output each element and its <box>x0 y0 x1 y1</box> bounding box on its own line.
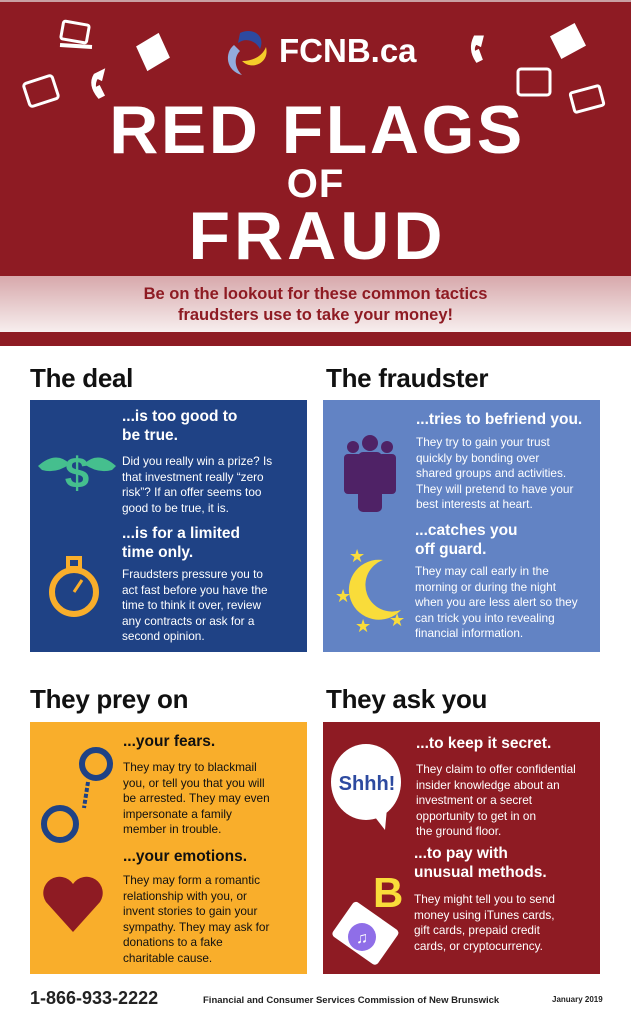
panel: the fraudster: quickly by bonding over <box>416 450 539 464</box>
panel: they ask you: investment or a secret <box>416 793 532 807</box>
footer: date: January 2019 <box>552 995 603 1004</box>
panel: the fraudster: financial information. <box>415 626 523 640</box>
header banner <box>0 0 631 346</box>
icon: winged dollar <box>38 449 116 498</box>
title <box>109 92 525 274</box>
panel: the deal: second opinion. <box>122 629 205 643</box>
panel: they prey on: charitable cause. <box>123 950 212 964</box>
icon: winged dollar: $ <box>65 449 89 498</box>
icon: handcuffs <box>41 747 113 843</box>
panel: they prey on: relationship with you, or <box>123 888 247 902</box>
icon: moon and stars: ★ <box>349 546 365 566</box>
panel: they prey on: ...your fears. <box>123 733 215 750</box>
icon: bitcoin and gift card: B <box>373 869 403 916</box>
panel: the deal: ...is for a limited <box>122 525 240 542</box>
panel: they prey on: ...your emotions. <box>123 848 247 865</box>
icon: moon and stars <box>335 546 405 635</box>
panel: the fraudster: when you are less alert so they <box>415 595 578 609</box>
title: RED FLAGS <box>109 92 525 168</box>
icon: Shhh speech bubble <box>331 744 401 830</box>
panel: they ask you <box>323 722 600 974</box>
panel: the fraudster: They will pretend to have your <box>416 482 573 496</box>
icon: moon and stars: ★ <box>389 610 405 630</box>
panel: the deal <box>30 400 307 652</box>
panel: they prey on: They may try to blackmail <box>123 760 257 774</box>
panel: they prey on <box>30 722 307 974</box>
panel: the deal: be true. <box>122 427 178 444</box>
icon: heart <box>43 876 103 932</box>
icon: stopwatch <box>49 556 99 617</box>
panel: the deal: act fast before you have the <box>122 582 268 596</box>
title: OF <box>287 162 344 206</box>
panel: they ask you: the ground floor. <box>416 824 501 838</box>
panel: the fraudster: can trick you into revealing <box>415 610 555 624</box>
panel: they ask you: They claim to offer confidential <box>416 762 576 776</box>
tagline band: fraudsters use to take your money! <box>178 306 453 324</box>
panel: the fraudster: They try to gain your trust <box>416 435 550 449</box>
tagline band <box>0 276 631 332</box>
panel: the deal: Fraudsters pressure you to <box>122 567 263 581</box>
heading: They ask you: They ask you <box>326 684 487 714</box>
panel: they ask you: ...to pay with <box>414 845 508 862</box>
heading: They prey on: They prey on <box>30 684 188 714</box>
panel: they prey on: donations to a fake <box>123 935 223 949</box>
panel: they prey on: you, or tell you that you will <box>123 776 265 790</box>
panel: the fraudster: They may call early in the <box>415 564 549 578</box>
panel: the fraudster: ...catches you <box>415 522 518 539</box>
logo text: FCNB.ca <box>279 32 417 69</box>
icon: bitcoin and gift card: ♫ <box>356 930 368 947</box>
icon: Shhh speech bubble: Shhh! <box>339 773 395 795</box>
panel: they ask you: money using iTunes cards, <box>414 908 555 922</box>
icon: bitcoin and gift card <box>332 869 403 965</box>
panel: the fraudster: off guard. <box>415 541 486 558</box>
panel: the deal: that investment really “zero <box>122 470 264 484</box>
panel: they ask you: gift cards, prepaid credit <box>414 923 540 937</box>
icon: people <box>344 435 396 512</box>
panel: they ask you: unusual methods. <box>414 864 547 881</box>
footer: commission name: Financial and Consumer Services Commission of New Brunswick <box>203 995 499 1006</box>
panel: the deal: time only. <box>122 544 193 561</box>
panel: the deal: good to be true, it is. <box>122 500 229 514</box>
panel: they ask you: opportunity to get in on <box>416 808 536 822</box>
icons: decorative devices <box>22 20 606 114</box>
panel: they prey on: They may form a romantic <box>123 873 260 887</box>
heading: The fraudster: The fraudster <box>326 363 488 393</box>
panel: the fraudster: best interests at heart. <box>416 497 533 511</box>
panel: the deal: Did you really win a prize? Is <box>122 454 272 468</box>
heading: The deal: The deal <box>30 363 133 393</box>
tagline band: Be on the lookout for these common tactics <box>144 285 487 303</box>
panel: they prey on: be arrested. They may even <box>123 791 270 805</box>
panel: they ask you: insider knowledge about an <box>416 778 560 792</box>
panel: they prey on: invent stories to gain your <box>123 904 257 918</box>
panel: the deal: any contracts or ask for a <box>122 614 254 628</box>
panel: they prey on: member in trouble. <box>123 822 221 836</box>
panel: they ask you: They might tell you to send <box>414 892 555 906</box>
panel: they ask you: cards, or cryptocurrency. <box>414 938 543 952</box>
panel: the deal: risk”? If an offer seems too <box>122 485 261 499</box>
panel: they prey on: sympathy. They may ask for <box>123 920 269 934</box>
panel: the fraudster: ...tries to befriend you. <box>416 411 582 428</box>
icon: moon and stars: ★ <box>335 586 351 606</box>
panel: the fraudster: shared groups and activities. <box>416 466 566 480</box>
panel: they ask you: ...to keep it secret. <box>416 735 551 752</box>
panel: the deal: time to think it over, review <box>122 598 261 612</box>
panel: the deal: ...is too good to <box>122 408 237 425</box>
title: FRAUD <box>189 198 446 274</box>
footer: phone: 1-866-933-2222 <box>30 988 158 1008</box>
panel: the fraudster <box>323 400 600 652</box>
logo <box>228 31 417 75</box>
panel: the fraudster: morning or during the night <box>415 580 556 594</box>
panel: they prey on: impersonate a family <box>123 806 232 820</box>
